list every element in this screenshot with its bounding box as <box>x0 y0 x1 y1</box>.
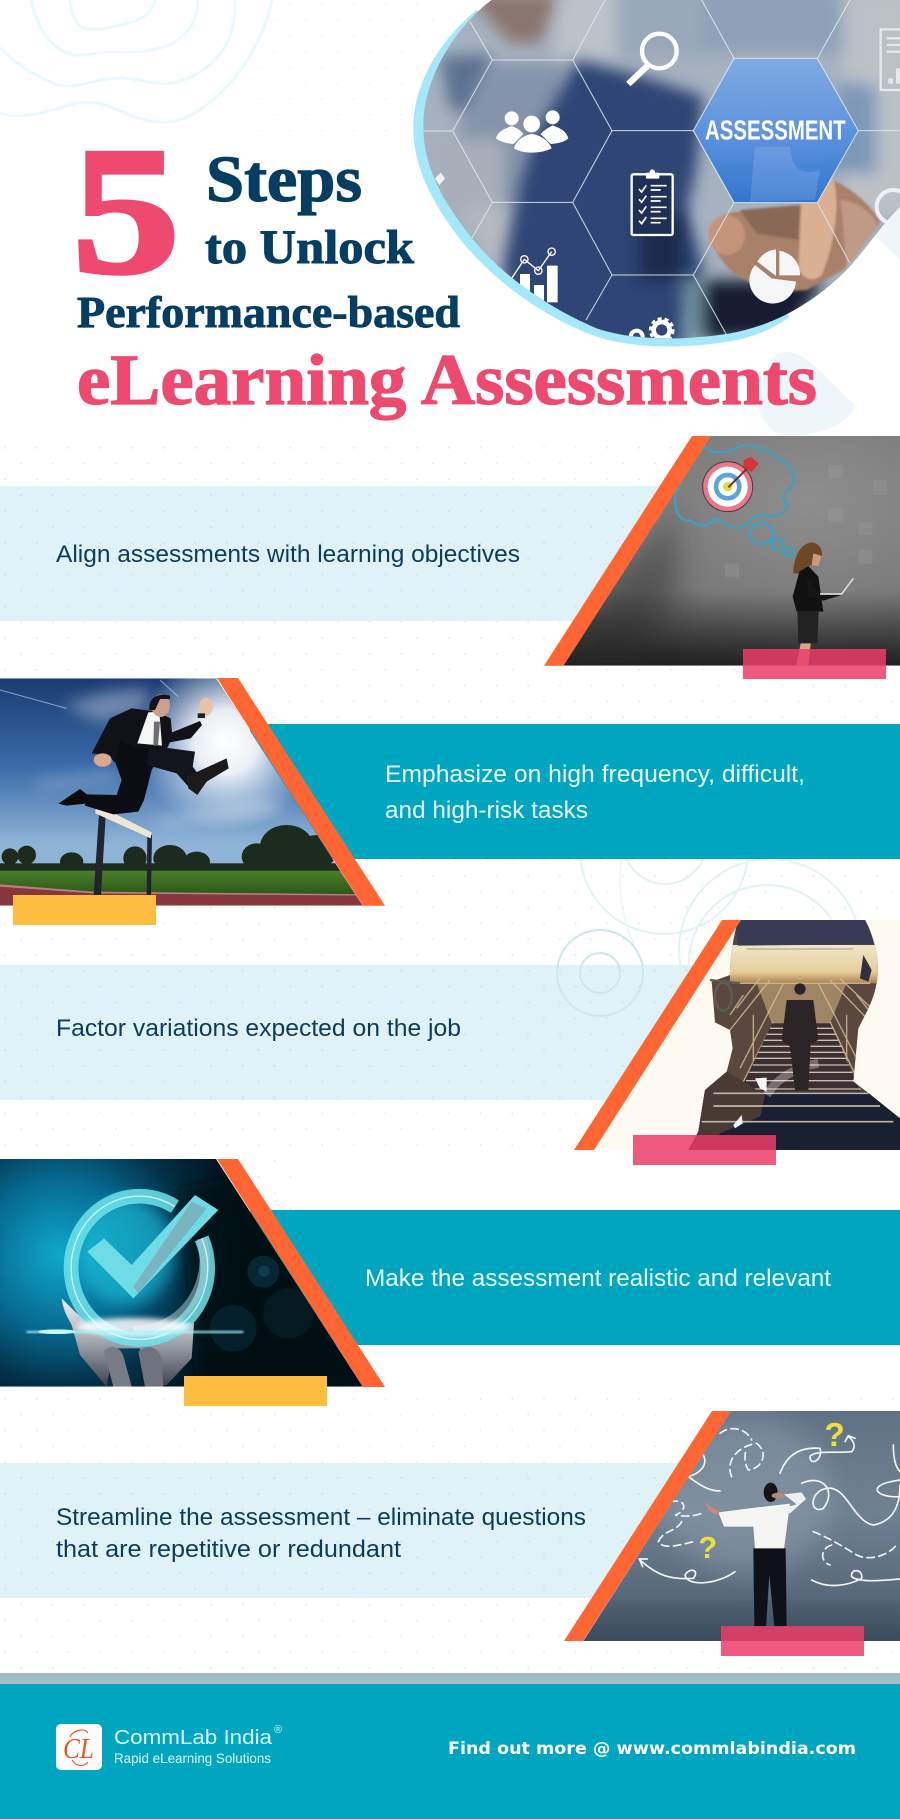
target <box>703 457 759 512</box>
step 3 text: Factor variations expected on the job <box>56 1015 461 1042</box>
panel: step 5 <box>0 1405 900 1656</box>
pink tab <box>721 1626 864 1656</box>
icon: partial shapes at edges <box>435 29 900 223</box>
footer <box>0 1673 900 1819</box>
step 1 photo: woman and target thought bubble <box>540 430 900 667</box>
heading line: eLearning assessments: eLearning Assessments <box>77 340 817 420</box>
icon: people group <box>496 110 568 153</box>
big number five: 5 <box>72 111 180 312</box>
step 1 text: Align assessments with learning objectives <box>56 541 520 568</box>
yellow tab <box>184 1376 327 1406</box>
panel: hero photo blob <box>410 0 900 435</box>
step 2 text: Emphasize on high frequency, difficult, <box>385 761 805 788</box>
heading line: performance-based: Performance-based <box>77 288 460 337</box>
heading line: to unlock: to Unlock <box>205 221 414 274</box>
hurdle <box>94 804 152 895</box>
registered mark: ® <box>274 1724 282 1736</box>
footer background <box>0 1684 900 1819</box>
step 2 text <box>385 761 805 824</box>
footer strip <box>0 1673 900 1684</box>
man from behind <box>705 1483 806 1627</box>
heading line: steps: Steps <box>206 143 362 216</box>
hexagon label: ASSESSMENT <box>705 114 846 145</box>
step 4 band <box>250 1210 900 1345</box>
website call to action: Find out more @ www.commlabindia.com <box>448 1739 856 1759</box>
step 4 photo: glowing check mark in hand <box>0 1155 367 1388</box>
pink tab <box>743 649 886 679</box>
question marks: ? <box>824 1417 845 1454</box>
glasses <box>710 980 740 1011</box>
step 2 text: and high-risk tasks <box>385 797 588 824</box>
step 1 band <box>0 486 700 621</box>
logo icon <box>56 1724 102 1770</box>
railings <box>730 978 875 1083</box>
logo tagline: Rapid eLearning Solutions <box>114 1750 271 1766</box>
step 4 text: Make the assessment realistic and relevant <box>365 1265 831 1292</box>
step 5 text: Streamline the assessment – eliminate questions <box>56 1504 586 1531</box>
panel: step 1 <box>0 430 900 679</box>
walking figure <box>782 983 818 1090</box>
assessment photo with hexagon grid <box>410 0 900 347</box>
woman with laptop <box>793 542 853 667</box>
panel: step 3 <box>0 720 900 1165</box>
pink tab <box>633 1135 776 1165</box>
orange divider <box>574 920 741 1150</box>
step 5 text <box>56 1504 586 1563</box>
step 5 band <box>0 1463 700 1598</box>
logo wordmark: CommLab India <box>114 1727 273 1749</box>
thought bubbles <box>750 523 793 557</box>
step 2 photo: businessman jumping hurdle <box>0 678 362 906</box>
pale accent shapes <box>758 205 900 435</box>
jumping man <box>58 694 229 814</box>
orange divider <box>217 678 385 906</box>
title <box>72 111 817 420</box>
orange divider <box>564 1411 731 1641</box>
step 3 photo: man climbing stairs in head silhouette <box>570 915 900 1152</box>
thought cloud <box>675 445 793 528</box>
icon: pie chart <box>749 249 800 304</box>
trees <box>0 825 353 872</box>
step 2 band <box>250 724 900 859</box>
icon: checklist clipboard <box>632 169 673 235</box>
check mark <box>87 1195 218 1298</box>
icon: gears <box>631 319 673 343</box>
step 5 photo: man facing chalk arrows <box>560 1405 900 1642</box>
logo icon: CL <box>63 1734 94 1765</box>
icon: magnifier <box>628 34 677 84</box>
step 3 band <box>0 965 700 1100</box>
hand <box>62 1298 194 1387</box>
decorative contour lines top left <box>0 0 272 122</box>
orange divider <box>217 1159 385 1387</box>
decorative concentric circles <box>556 859 857 1017</box>
panel: step 2 <box>0 652 900 925</box>
step 5 text: that are repetitive or redundant <box>56 1536 401 1563</box>
orange divider <box>544 436 711 666</box>
hand pointing <box>708 177 880 291</box>
chalk arrows <box>639 1429 900 1585</box>
yellow tab <box>13 895 156 925</box>
check ring <box>71 1196 208 1339</box>
question marks: ? <box>698 1531 717 1565</box>
icon: bar and line chart <box>512 248 558 305</box>
panel: step 4 <box>0 1155 900 1406</box>
light blue ring <box>413 10 790 346</box>
question marks <box>700 1422 843 1558</box>
